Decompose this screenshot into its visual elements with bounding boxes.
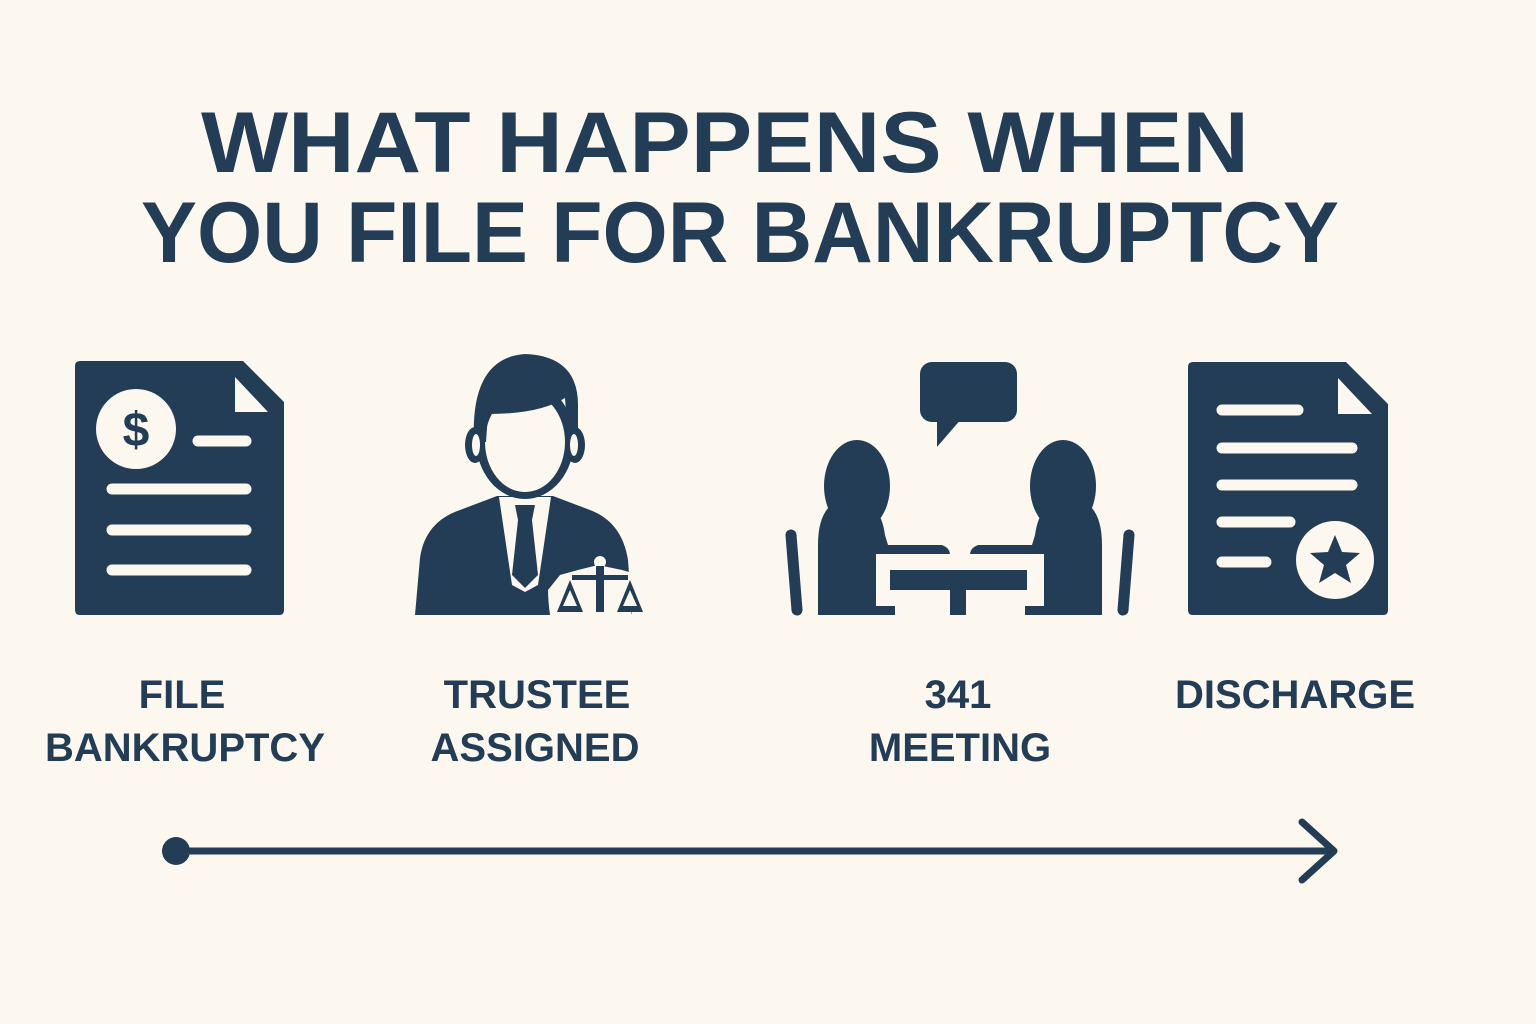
icon: bankruptcy document (75, 361, 284, 615)
label: 341 meeting: 341 (925, 673, 991, 717)
label: file bankruptcy: BANKRUPTCY (45, 726, 325, 770)
icon: discharge document (1188, 362, 1388, 615)
icon: scales (548, 556, 652, 615)
title: WHAT HAPPENS WHEN (201, 95, 1249, 191)
icon: 341 meeting (791, 362, 1129, 615)
label: discharge: DISCHARGE (1175, 673, 1415, 717)
icon: trustee (415, 354, 652, 615)
title: YOU FILE FOR BANKRUPTCY (141, 185, 1339, 281)
label: file bankruptcy (45, 673, 325, 770)
label: file bankruptcy: FILE (139, 673, 225, 717)
label: 341 meeting (869, 673, 1051, 770)
label: trustee assigned: ASSIGNED (431, 726, 639, 770)
label: 341 meeting: MEETING (869, 726, 1051, 770)
icon: bankruptcy document: $ (123, 404, 150, 457)
title (141, 95, 1339, 281)
arrow: timeline (162, 822, 1334, 880)
label: trustee assigned: TRUSTEE (444, 673, 630, 717)
label: trustee assigned (431, 673, 639, 770)
